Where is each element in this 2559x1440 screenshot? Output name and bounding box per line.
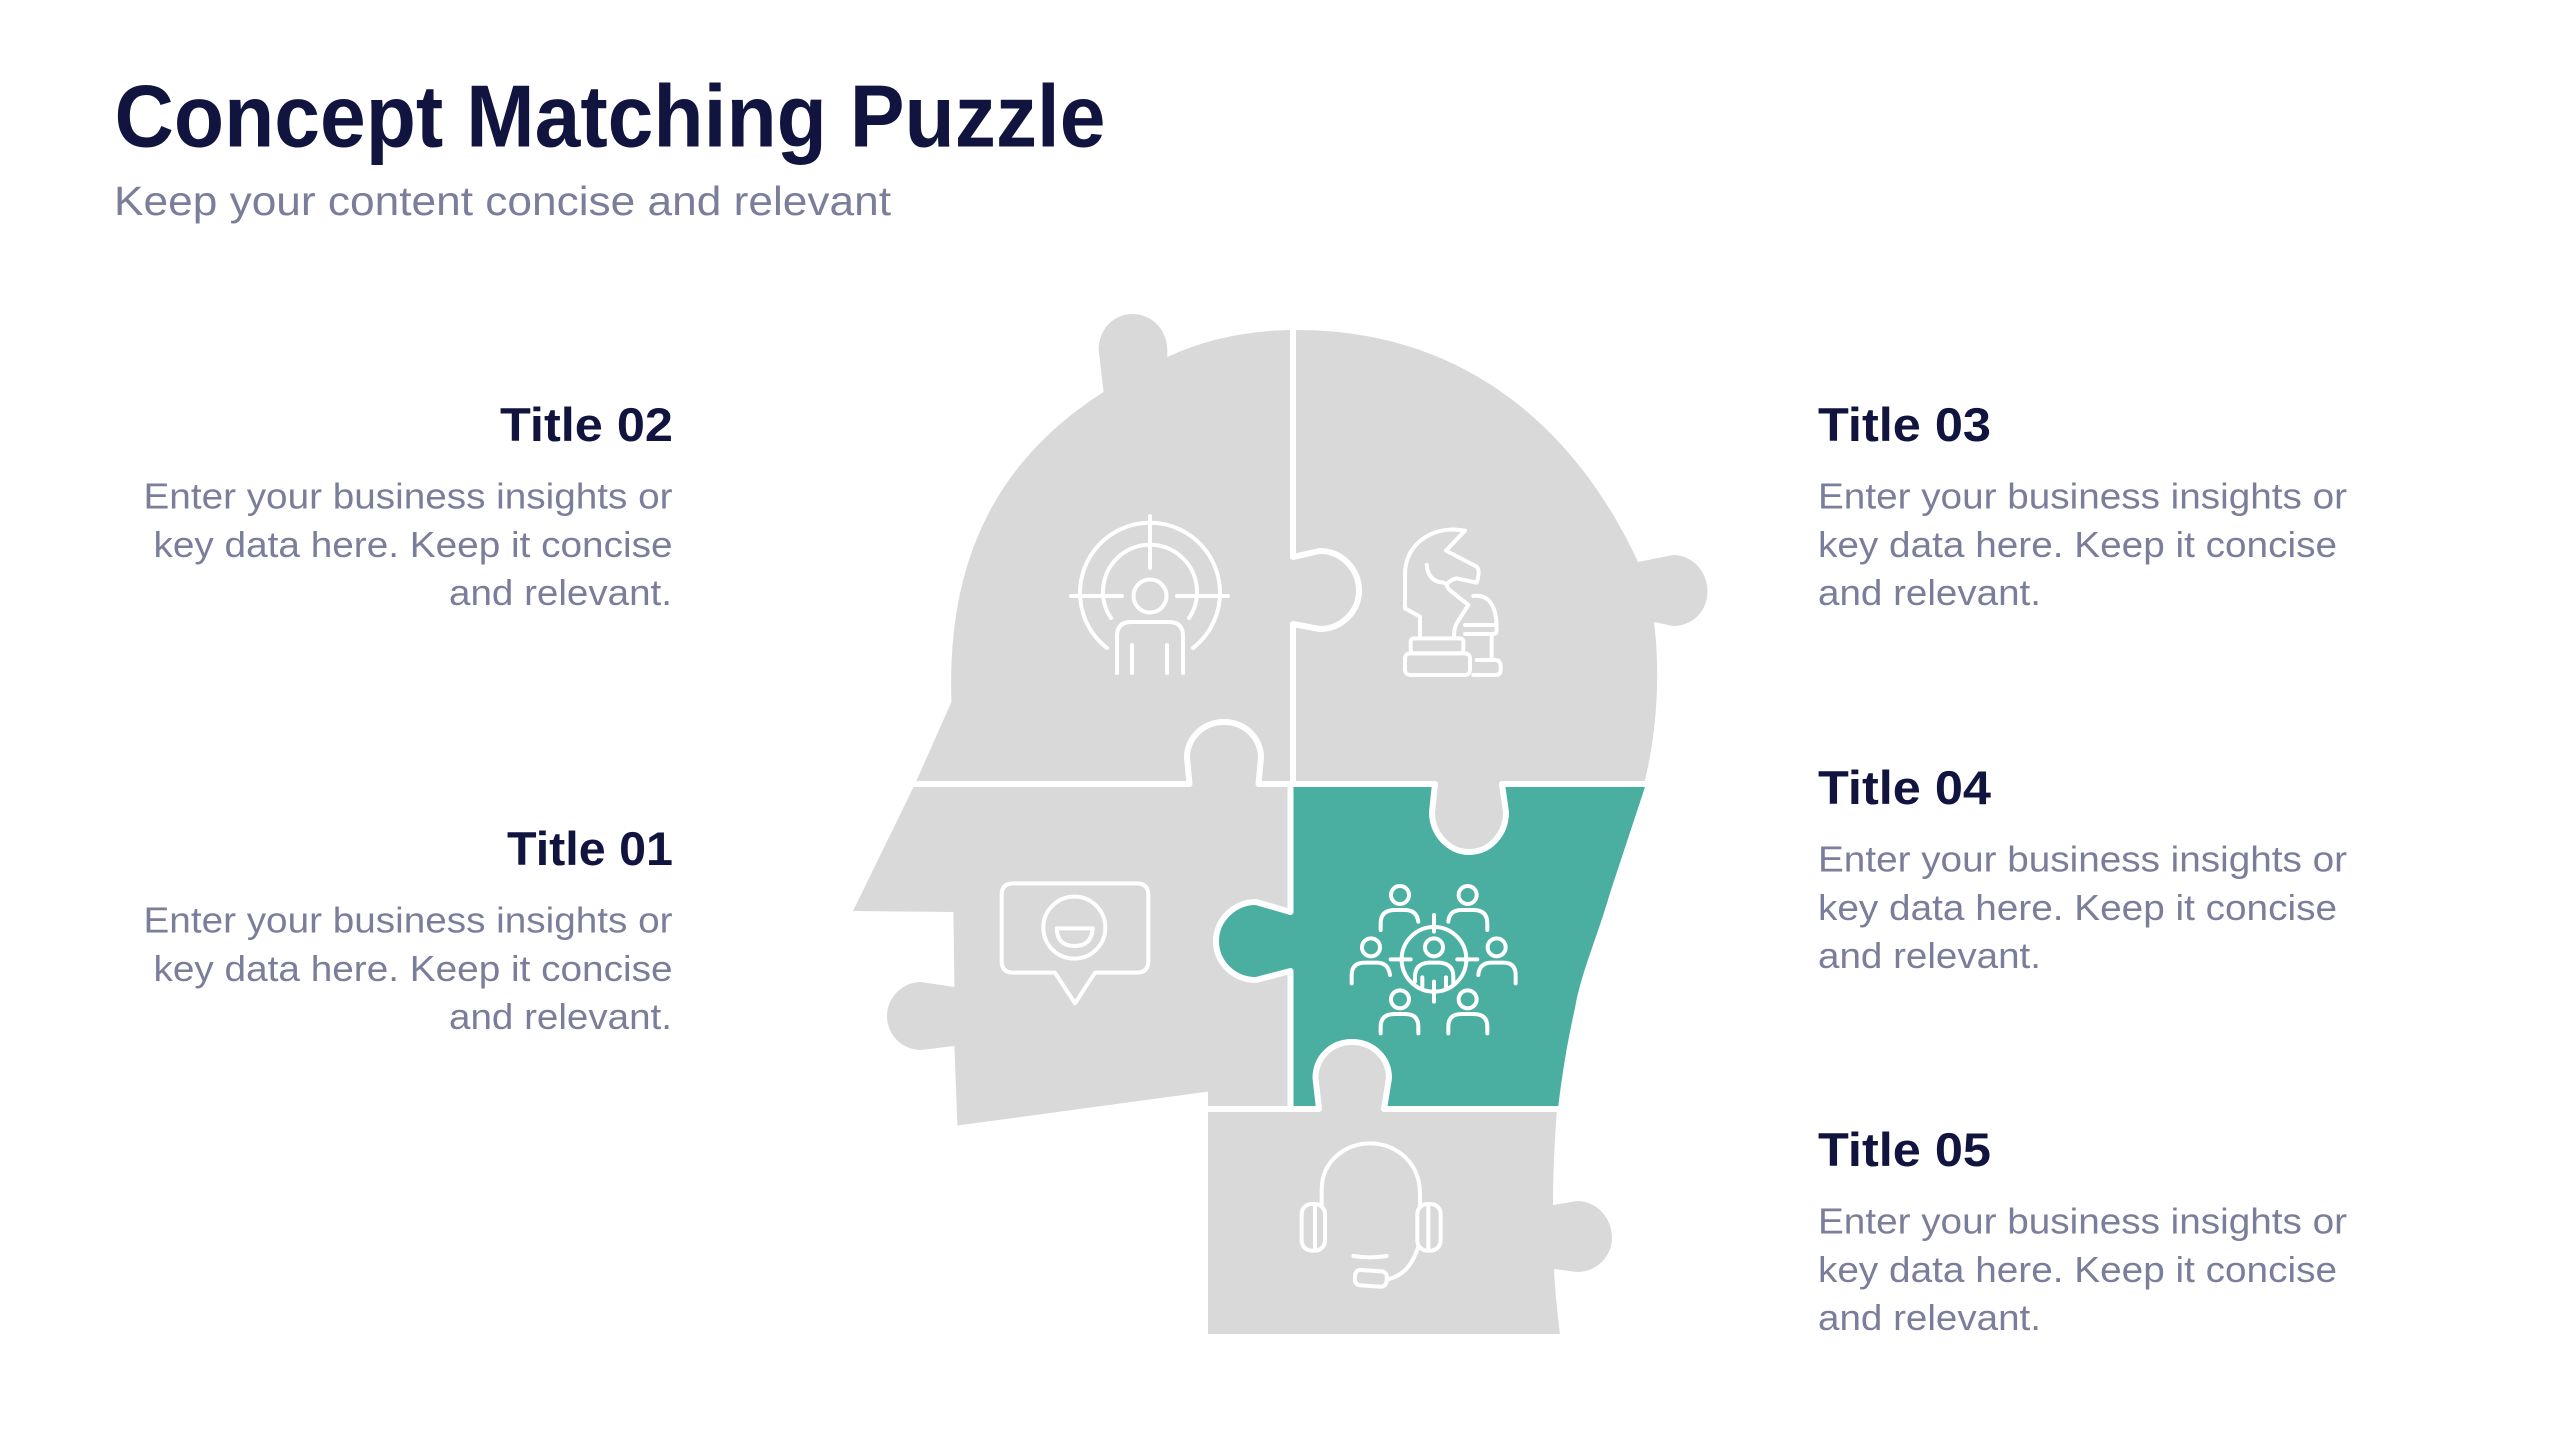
puzzle head diagram bbox=[853, 314, 1708, 1334]
icon: team target bbox=[1352, 886, 1516, 1033]
text block: Title 04: key data here. Keep it concise bbox=[1818, 887, 2337, 928]
puzzle piece 04 highlighted bbox=[1216, 784, 1646, 1109]
text block: Title 05 bbox=[1818, 1123, 2347, 1338]
icon: target person bbox=[1071, 516, 1228, 673]
white seams between pieces bbox=[910, 325, 1651, 1109]
text block: Title 01: and relevant. bbox=[449, 996, 672, 1037]
text block: Title 04: Enter your business insights or bbox=[1818, 838, 2347, 880]
text block: Title 04 bbox=[1818, 761, 2347, 976]
text block: Title 01 bbox=[144, 822, 673, 1037]
puzzle piece 01 bbox=[853, 722, 1293, 1126]
text block: Title 02: key data here. Keep it concise bbox=[154, 524, 672, 565]
text block: Title 05: key data here. Keep it concise bbox=[1818, 1249, 2337, 1290]
text block: Title 03: and relevant. bbox=[1818, 572, 2041, 613]
icon: speech bubble smile bbox=[1002, 883, 1148, 1003]
text block: Title 05: and relevant. bbox=[1818, 1297, 2041, 1338]
text block: Title 01: Title 01 bbox=[507, 822, 673, 875]
text block: Title 04: and relevant. bbox=[1818, 935, 2041, 976]
icon: chess knight and pawn bbox=[1405, 529, 1501, 675]
text block: Title 02: and relevant. bbox=[449, 572, 672, 613]
text block: Title 02 bbox=[144, 398, 673, 613]
text block: Title 03: key data here. Keep it concise bbox=[1818, 524, 2337, 565]
text block: Title 02: Enter your business insights or bbox=[144, 476, 673, 516]
text block: Title 05: Title 05 bbox=[1818, 1123, 1991, 1176]
text block: Title 03: Enter your business insights or bbox=[1818, 476, 2347, 516]
text block: Title 03: Title 03 bbox=[1818, 398, 1991, 451]
text block: Title 01: Enter your business insights or bbox=[144, 900, 673, 940]
puzzle piece 02 bbox=[915, 314, 1359, 784]
text block: Title 01: key data here. Keep it concise bbox=[154, 948, 672, 989]
text block: Title 03 bbox=[1818, 398, 2347, 613]
puzzle piece 03 bbox=[1293, 330, 1708, 852]
text block: Title 05: Enter your business insights or bbox=[1818, 1200, 2347, 1242]
puzzle piece 05 bbox=[1208, 1042, 1612, 1334]
title: Concept Matching Puzzle bbox=[114, 66, 1106, 166]
text block: Title 04: Title 04 bbox=[1818, 761, 1991, 814]
text block: Title 02: Title 02 bbox=[500, 398, 673, 451]
subtitle: Keep your content concise and relevant bbox=[114, 178, 892, 224]
icon: headset bbox=[1302, 1143, 1441, 1287]
